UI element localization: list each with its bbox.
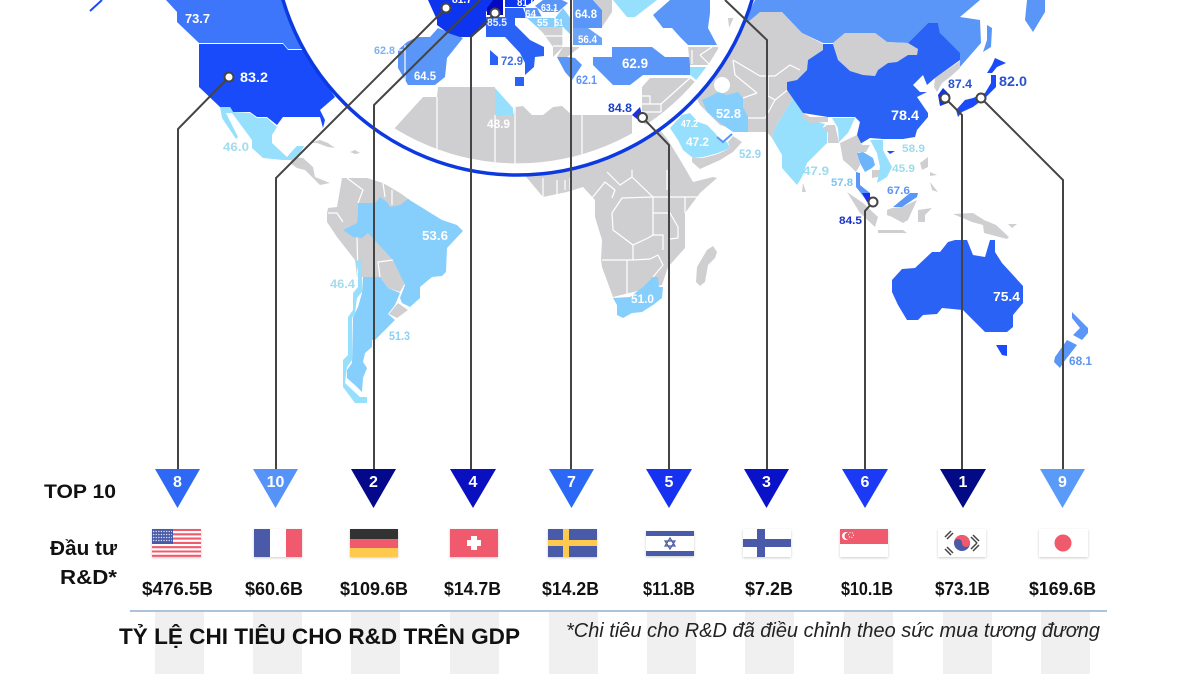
value: $476.5B [142,579,213,599]
South Korea [938,88,950,106]
map value labels: 51.3 [389,329,410,343]
column: South Korea [935,469,990,599]
Caucasus gray [688,47,720,65]
map value labels: 72.9 [501,54,523,68]
Taiwan [887,151,895,154]
Central Asia gray [690,12,823,138]
map value labels: 87.4 [948,77,972,91]
map value labels: 51.0 [631,292,654,306]
rank marker 7: 7 [567,474,576,491]
Lithuania [573,28,602,45]
Uruguay [389,303,408,318]
flag: Sweden [548,529,597,557]
rank marker 4: 4 [469,474,478,491]
North Korea [934,61,960,92]
column: Japan [1029,469,1096,599]
map value labels: 82.0 [999,73,1027,89]
zoom circle outline [273,0,762,175]
Armenia region [690,67,706,80]
map value labels: 53.6 [422,228,448,243]
value: $7.2B [745,579,793,599]
Balkan borders [525,8,564,47]
Northeast India [832,118,855,142]
North Africa [394,87,632,164]
Algeria coastal [495,88,513,115]
map value labels: 85.5 [487,17,507,29]
Laos and Thailand [857,152,875,172]
map value labels: 84.5 [839,215,862,227]
magnified Europe disc [273,0,762,175]
flag: Singapore [840,529,888,557]
rank marker 3: 3 [762,474,771,491]
leader endpoints [224,4,986,206]
Australia [892,240,1023,332]
Africa borders [543,170,700,297]
South Africa [613,277,663,318]
Italy [486,8,544,75]
United States [199,44,335,128]
leader Sweden [570,0,572,470]
Madagascar [696,246,717,286]
Slovenia [525,8,542,17]
footnote: *Chi tiêu cho R&D đã điều chỉnh theo sức mua tương đương [566,620,1100,642]
value: $169.6B [1029,579,1096,599]
value: $11.8B [643,579,695,599]
Turkey [593,47,690,85]
leader South Korea [945,98,962,470]
value: $60.6B [245,579,303,599]
Iran [702,92,748,132]
Nepal and Bangladesh [802,113,839,143]
row label: top 10: TOP 10 [44,481,116,503]
leader lines [178,0,1063,470]
rank marker 2: 2 [369,474,378,491]
map value labels: 57.8 [831,177,853,189]
China [787,23,960,144]
column: Singapore [840,469,893,599]
map value labels: 46.0 [223,140,249,154]
row label: R&D investment: Đầu tư [50,538,118,560]
Kamchatka and Sakhalin [983,0,1045,52]
leader Israel [642,118,669,470]
map value labels: 55 [537,18,548,29]
Chile [343,260,367,403]
rank marker 6: 6 [861,474,870,491]
value: $73.1B [935,579,990,599]
rank marker 9: 9 [1058,474,1067,491]
Balkans [537,27,563,57]
map value labels: 73.7 [185,11,210,26]
Canada [166,0,302,49]
world map [90,0,1088,403]
map value labels [185,0,1092,368]
Spain [398,28,463,85]
column: Finland [743,469,793,599]
Spain border [398,45,405,82]
chart title: TỶ LỆ CHI TIÊU CHO R&D TRÊN GDP [119,624,520,649]
map value labels: 52.9 [739,147,761,161]
flag: Israel [646,531,694,556]
flag: Germany [350,529,398,557]
Central Asia borders [733,60,800,118]
flag: Japan [1039,529,1088,557]
Argentina [347,277,400,392]
Mongolia [833,33,918,76]
Israel [632,107,642,119]
rank marker 1: 1 [959,474,968,491]
map value labels: 67.6 [887,185,910,197]
rank marker 5: 5 [665,474,674,491]
row label: R&D investment: R&D* [60,567,117,589]
map value labels: 62.8 [374,45,395,57]
Tasmania [996,345,1007,356]
Malaysia [856,172,870,200]
Austria [505,0,535,7]
Middle East gray [642,78,694,126]
column: Switzerland [444,469,501,599]
map value labels: 47.2 [686,135,709,149]
Central America and Caribbean [290,140,360,185]
Hungary [535,0,568,12]
inset map of Europe and Middle East [394,0,734,164]
map value labels: 46.4 [330,277,355,291]
column: United States [142,469,213,599]
leader Japan [981,98,1063,470]
India [772,98,827,185]
column: Israel [643,469,695,599]
Russia [744,0,981,67]
map value labels: 68.1 [1069,354,1092,368]
Alaska stroke [90,0,102,11]
South America gray [327,178,410,292]
flag: Switzerland [450,529,498,557]
flag: France [254,529,302,557]
column: France [245,469,303,599]
map value labels: 47.2 [681,119,698,130]
leader Germany [374,0,480,470]
Poland [573,0,602,28]
map value labels: 78.4 [891,107,919,123]
Caspian sea [714,77,730,93]
Africa [505,130,717,297]
South America borders [328,178,393,277]
column: Germany [340,469,408,599]
map value labels: 63.1 [541,3,558,14]
small grey wedge [728,18,734,28]
column: Sweden [542,469,599,599]
map value labels: 64.8 [575,7,597,21]
North Africa borders [436,97,583,164]
Black Sea coast gray [557,47,580,57]
value: $14.2B [542,579,599,599]
grey column stubs below divider [155,612,1090,674]
map value labels: 58.9 [902,143,925,155]
France [428,0,495,37]
Yemen and Oman [692,136,742,169]
Saudi Arabia [670,113,730,158]
map value labels: 64.5 [414,69,436,83]
leader Singapore [865,202,873,470]
map value labels: 48.9 [487,117,510,131]
Borneo Malaysia [893,193,918,207]
Brazil [343,197,463,307]
map value labels: 62.1 [576,73,597,87]
Japan [956,58,1006,117]
map value labels: 45.9 [892,163,915,175]
Croatia [527,18,555,27]
map value labels: 64 [525,9,536,20]
Ukraine [593,0,612,27]
flag: South Korea [938,529,986,557]
flag: USA [152,529,201,557]
map value labels: 83.2 [240,69,268,85]
map value labels: 62.9 [622,55,648,71]
leader Finland [725,0,767,470]
United Arab Emirates [717,134,732,142]
Mexico [220,107,304,160]
Greece [557,57,582,80]
leader USA [178,77,229,470]
Finland [613,0,657,17]
value: $14.7B [444,579,501,599]
map value labels: 51 [555,18,563,29]
Switzerland [487,0,503,15]
Vietnam [870,140,892,183]
flag: Finland [743,529,791,557]
map value labels: 84.8 [608,101,632,115]
map value labels: 56.4 [578,34,598,46]
value: $109.6B [340,579,408,599]
Russia inset [653,0,717,45]
rank marker 8: 8 [173,474,182,491]
value: $10.1B [841,579,893,599]
map value labels: 75.4 [993,289,1021,304]
leader Switzerland [471,13,495,470]
map value labels: 47.9 [803,164,829,178]
Sicily [515,77,524,86]
Romania [556,8,570,34]
Southeast Asia gray [802,135,1017,239]
leader France [276,8,446,470]
Middle East borders [642,78,690,126]
Singapore [862,193,870,203]
New Zealand [1054,312,1088,368]
Sardinia [490,50,498,65]
map value labels: 52.8 [716,106,741,121]
Caucasus border [692,47,712,65]
rank marker 10: 10 [267,474,284,491]
row label: R&D investment [50,538,118,589]
